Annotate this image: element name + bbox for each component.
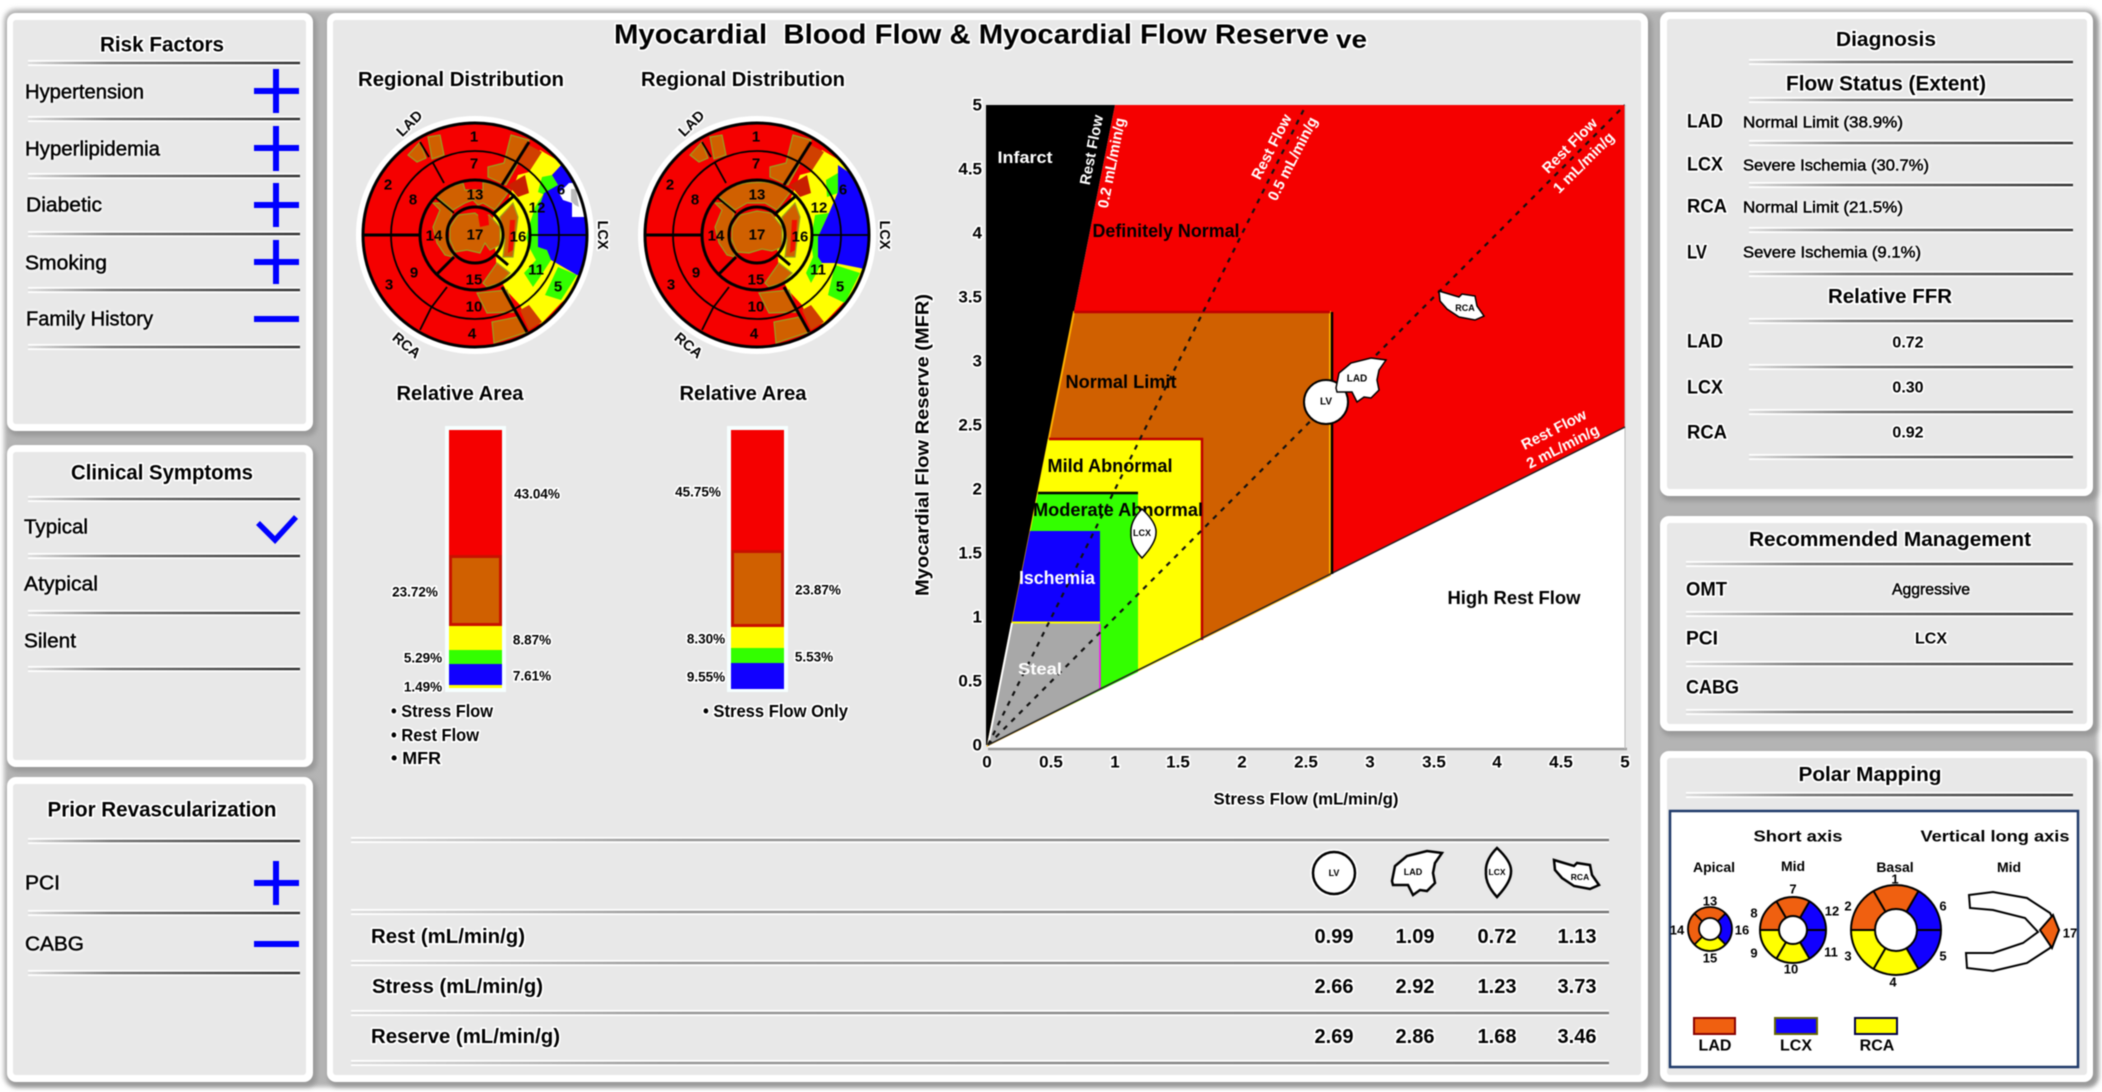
label: hyperlipidemia: Hyperlipidemia [25, 138, 161, 160]
vertical long axis shape [1966, 892, 2059, 971]
region: mild abnormal [988, 439, 1202, 745]
row: LCX status: LCX [1687, 154, 1723, 176]
marker: LV: LV [1320, 396, 1332, 408]
segment numbers: 15 [1703, 950, 1717, 966]
row: OMT: Aggressive [1892, 582, 1970, 598]
row: LCX ffr: 0.30 [1892, 380, 1924, 396]
iso-flow labels: 1 mL/min/g [1550, 129, 1618, 197]
icon: LV [1310, 849, 1358, 897]
segment numbers: 4 [1889, 974, 1897, 990]
row: rest: 1.09 [1396, 926, 1434, 948]
label: pci: PCI [25, 872, 60, 894]
segment numbers: 10 [748, 298, 764, 316]
icon: RCA: RCA [1571, 872, 1589, 882]
heading: short axis: Short axis [1754, 828, 1842, 846]
label: apical: Apical [1693, 859, 1735, 875]
region: high rest flow [988, 427, 1625, 748]
panel: prior revascularization [7, 777, 317, 1087]
iso-flow labels: Rest Flow [1539, 115, 1601, 177]
region labels: High Rest Flow [1448, 588, 1582, 608]
segment numbers: 14 [708, 228, 725, 244]
segment numbers: 16 [510, 228, 526, 246]
bar percent labels: 23.87% [795, 582, 841, 598]
region: moderate abnormal [988, 493, 1138, 745]
bar percent labels: 8.87% [513, 632, 551, 648]
segment numbers [384, 128, 565, 342]
iso-flow labels: 0.5 mL/min/g [1265, 114, 1321, 204]
row: stress: 2.66 [1315, 976, 1353, 998]
legend: right bar: • Stress Flow Only [703, 701, 848, 721]
bar percent labels: 5.29% [404, 650, 442, 666]
iso-flow labels: Rest Flow [1077, 113, 1107, 186]
x axis tick labels: 1.5 [1166, 752, 1190, 772]
row: LV status: Severe Ischemia (9.1%) [1743, 244, 1921, 262]
row: PCI: PCI [1686, 628, 1718, 650]
row: RCA ffr [1687, 422, 1924, 444]
region labels [998, 149, 1582, 678]
y axis tick labels: 3.5 [958, 288, 982, 306]
table: flow values [351, 840, 1609, 1063]
bar percent labels: 43.04% [514, 486, 560, 502]
panel: clinical symptoms [7, 445, 317, 772]
panel: polar mapping [1660, 751, 2098, 1087]
legend: LAD: LAD [1699, 1038, 1731, 1054]
icon: plus pci [254, 861, 299, 905]
heading: risk factors: Risk Factors [100, 34, 224, 56]
segment numbers: 9 [1750, 946, 1758, 960]
segment numbers: 9 [410, 264, 418, 282]
marker: RCA: RCA [1455, 303, 1475, 313]
iso-flow labels [1077, 111, 1618, 473]
x axis tick labels: 0 [982, 752, 992, 772]
legend: RCA: RCA [1860, 1038, 1895, 1054]
x axis title: Stress Flow (mL/min/g) [1214, 790, 1398, 808]
y axis title: Myocardial Flow Reserve (MFR) [912, 294, 932, 596]
label: hypertension: Hypertension [25, 80, 144, 104]
region: normal limit [988, 312, 1330, 745]
icon: plus hypertension [254, 69, 299, 113]
heading: recommended management: Recommended Management [1749, 529, 2031, 551]
region labels: Infarct [998, 149, 1053, 167]
iso-flow labels: Rest Flow [1248, 111, 1296, 182]
row: RCA status: RCA [1687, 196, 1727, 218]
label: cabg: CABG [25, 932, 84, 956]
legend: LCX: LCX [1780, 1038, 1812, 1054]
row: LAD status: Normal Limit (38.9%) [1743, 114, 1903, 132]
row: reserve: 1.68 [1478, 1026, 1516, 1048]
row: reserve: 3.46 [1558, 1026, 1596, 1048]
iso-flow labels: Rest Flow [1519, 406, 1590, 454]
segment numbers: 8 [691, 192, 699, 208]
row: rest: 0.72 [1478, 926, 1516, 948]
segment numbers: 11 [810, 262, 826, 278]
segment numbers: 10 [466, 298, 482, 316]
icon: minus cabg [254, 941, 299, 947]
legend: left bar [391, 701, 493, 768]
icon: check mark [258, 517, 296, 540]
region: steal [988, 623, 1100, 745]
donut: apical [1687, 906, 1733, 952]
heading: relative area right: Relative Area [680, 383, 807, 405]
polar map: right [638, 116, 879, 354]
segment numbers: 6 [557, 182, 565, 198]
label: RCA right: RCA [671, 330, 706, 363]
heading: diagnosis: Diagnosis [1836, 29, 1936, 51]
label: basal: Basal [1876, 859, 1914, 875]
heading: regional distribution left: Regional Distribution [358, 69, 564, 91]
label: silent: Silent [24, 630, 76, 652]
row: rest: 0.99 [1315, 926, 1353, 948]
row: stress: Stress (mL/min/g) [372, 976, 543, 998]
row: rest: 1.13 [1558, 926, 1596, 948]
row: stress [372, 976, 1596, 998]
icon: LAD: LAD [1404, 867, 1423, 877]
label: RCA left: RCA [389, 330, 424, 363]
y axis tick labels: 0.5 [958, 672, 982, 690]
legend: left bar: • MFR [391, 748, 441, 768]
x axis tick labels: 1 [1110, 752, 1120, 772]
row: OMT: OMT [1686, 580, 1727, 600]
heading: prior revascularization: Prior Revascularization [48, 798, 276, 822]
x axis tick labels: 2.5 [1294, 752, 1318, 772]
row: LAD ffr [1687, 332, 1924, 352]
label: mid long axis: Mid [1997, 859, 2021, 875]
row: PCI [1686, 628, 1947, 650]
row: stress: 3.73 [1558, 976, 1596, 998]
x axis tick labels: 4.5 [1549, 752, 1573, 772]
bar percent labels: 1.49% [404, 680, 442, 694]
label: LAD right: LAD [676, 108, 708, 140]
segment numbers: 1 [470, 128, 478, 146]
segment numbers: 7 [470, 156, 478, 172]
segment numbers: 9 [692, 264, 700, 282]
icon: LCX: LCX [1488, 867, 1506, 877]
row: rest [371, 926, 1596, 948]
icon: RCA [1554, 860, 1599, 889]
segment numbers: 2 [1844, 898, 1852, 914]
region: definitely normal [988, 105, 1625, 745]
y axis tick labels: 4 [973, 224, 983, 242]
segment numbers: 4 [750, 326, 759, 342]
segment numbers: 5 [554, 278, 562, 296]
region labels: Normal Limit [1066, 372, 1177, 392]
bar percent labels: 7.61% [513, 668, 551, 684]
icon: plus smoking [254, 240, 299, 284]
x axis tick labels: 5 [1620, 752, 1630, 772]
segment numbers: 3 [1844, 948, 1852, 964]
segment numbers: 12 [811, 200, 827, 216]
panel: center [327, 13, 1652, 1087]
segment numbers: 12 [1825, 904, 1839, 918]
region labels: Ischemia [1019, 568, 1096, 588]
segment numbers: 2 [384, 176, 392, 194]
x axis tick labels [982, 752, 1630, 772]
region labels: Moderate Abnormal [1033, 500, 1203, 520]
legend: LAD [1694, 1018, 1735, 1054]
region: ischemia [1012, 531, 1100, 622]
row: LV status [1687, 242, 1921, 264]
legend: left bar: • Stress Flow [391, 701, 493, 721]
label: CABG: CABG [1686, 678, 1739, 698]
x axis tick labels: 4 [1492, 752, 1502, 772]
y axis tick labels: 0 [973, 736, 982, 754]
legend: LCX [1775, 1018, 1817, 1054]
segment numbers: 5 [836, 278, 844, 296]
segment numbers: 17 [467, 226, 483, 244]
row: RCA ffr: 0.92 [1892, 424, 1924, 442]
region labels: Mild Abnormal [1048, 456, 1172, 476]
segment numbers: 8 [1750, 906, 1758, 920]
y axis tick labels: 4.5 [958, 160, 982, 178]
row: reserve: Reserve (mL/min/g) [371, 1026, 560, 1048]
bar percent labels: 45.75% [675, 484, 721, 500]
x axis tick labels: 3.5 [1422, 752, 1446, 772]
segment numbers: 6 [839, 182, 847, 198]
heading: relative area left: Relative Area [396, 383, 524, 405]
segment numbers: 6 [1939, 898, 1947, 914]
stacked bar: left [392, 426, 560, 694]
label: LAD left: LAD [394, 108, 426, 140]
row: reserve [371, 1026, 1596, 1048]
donut: basal [1851, 885, 1941, 975]
segment numbers: 1 [752, 128, 760, 146]
marker: LCX: LCX [1133, 528, 1151, 538]
segment numbers: 15 [466, 272, 482, 288]
row: LAD ffr: LAD [1687, 332, 1723, 352]
boundary lines [988, 748, 1627, 750]
segment numbers: 17 [749, 226, 765, 244]
icon: plus diabetic [254, 183, 299, 227]
row: RCA ffr: RCA [1687, 422, 1727, 444]
label: typical: Typical [24, 516, 88, 538]
segment numbers: 1 [1891, 872, 1899, 886]
segment numbers: 14 [426, 228, 443, 244]
y axis tick labels [958, 96, 983, 754]
segment numbers: 4 [468, 326, 477, 342]
row: rest: Rest (mL/min/g) [371, 926, 525, 948]
segment numbers: 7 [1789, 882, 1797, 896]
label: family history: Family History [26, 308, 154, 330]
label: LCX right: LCX [876, 220, 892, 250]
title: Myocardial Blood Flow & Myocardial Flow Reserve [614, 18, 1329, 50]
bar percent labels: 9.55% [687, 670, 725, 684]
iso-flow dashed lines [988, 105, 1625, 745]
marker: LCX [1131, 509, 1156, 558]
bar percent labels: 5.53% [795, 650, 833, 664]
marker: RCA [1439, 291, 1484, 320]
row: RCA status [1687, 196, 1903, 218]
row: OMT [1686, 580, 1970, 600]
iso-flow labels: 0.2 mL/min/g [1095, 116, 1129, 210]
segment numbers: 11 [1824, 944, 1838, 960]
segment numbers: 12 [529, 200, 545, 216]
y axis tick labels: 5 [973, 96, 982, 114]
title overflow fragment: ve [1336, 26, 1367, 54]
row: LCX ffr: LCX [1687, 378, 1723, 398]
segment numbers: 15 [748, 272, 764, 288]
bar percent labels [392, 486, 560, 694]
segment numbers: 10 [1784, 962, 1798, 976]
legend: RCA [1855, 1018, 1897, 1054]
segment numbers [666, 128, 847, 342]
chart: flow capacity [912, 96, 1630, 808]
label: diabetic: Diabetic [26, 194, 102, 216]
region labels: Definitely Normal [1092, 221, 1240, 241]
heading: flow status: Flow Status (Extent) [1786, 72, 1986, 96]
heading: polar mapping: Polar Mapping [1798, 764, 1942, 786]
segment numbers [1670, 872, 2077, 990]
bar percent labels: 23.72% [392, 584, 438, 600]
y axis tick labels: 1 [973, 608, 982, 626]
segment numbers: 3 [667, 276, 675, 294]
x axis tick labels: 0.5 [1039, 752, 1063, 772]
polar map: left [356, 116, 597, 354]
x axis tick labels: 3 [1365, 752, 1375, 772]
heading: vertical long axis: Vertical long axis [1920, 828, 2070, 846]
row: LCX status [1687, 154, 1929, 176]
marker: LAD [1336, 358, 1386, 402]
heading: relative ffr: Relative FFR [1828, 286, 1953, 308]
region: infarct [986, 105, 1115, 745]
icon: LAD [1392, 851, 1442, 895]
bar percent labels [675, 484, 841, 684]
iso-flow labels: 2 mL/min/g [1524, 421, 1602, 473]
segment numbers: 16 [792, 228, 808, 246]
y axis tick labels: 2 [973, 480, 982, 498]
marker: LV [1304, 380, 1348, 424]
icon: LCX [1486, 848, 1511, 897]
icon: LV: LV [1329, 868, 1339, 878]
row: LAD ffr: 0.72 [1892, 334, 1924, 352]
marker: LAD: LAD [1347, 374, 1367, 384]
label: atypical: Atypical [24, 572, 98, 596]
segment numbers: 13 [749, 186, 765, 204]
row: reserve: 2.86 [1396, 1026, 1434, 1048]
icon: plus hyperlipidemia [254, 126, 299, 171]
row: stress: 1.23 [1478, 976, 1516, 998]
row: RCA status: Normal Limit (21.5%) [1743, 200, 1903, 216]
row: LCX status: Severe Ischemia (30.7%) [1743, 158, 1929, 174]
segment numbers: 14 [1670, 922, 1685, 938]
row: LAD status [1687, 112, 1903, 132]
segment numbers: 17 [2063, 926, 2077, 940]
donut: mid [1760, 897, 1826, 963]
segment numbers: 13 [1703, 894, 1717, 908]
bar percent labels: 8.30% [687, 632, 725, 646]
legend: left bar: • Rest Flow [391, 725, 479, 745]
region labels: Steal [1018, 660, 1062, 678]
segment numbers: 7 [752, 156, 760, 172]
panel: recommended management [1660, 516, 2098, 736]
row: reserve: 2.69 [1315, 1026, 1353, 1048]
y axis tick labels: 3 [973, 352, 982, 370]
segment numbers: 8 [409, 192, 417, 208]
label: smoking: Smoking [25, 252, 107, 274]
y axis tick labels: 1.5 [958, 544, 982, 562]
y axis tick labels: 2.5 [958, 416, 982, 434]
stacked bar: right [675, 426, 841, 692]
panel: risk factors [7, 13, 317, 436]
row: LAD status: LAD [1687, 112, 1723, 132]
segment numbers: 3 [385, 276, 393, 294]
segment numbers: 16 [1735, 922, 1749, 938]
heading: clinical symptoms: Clinical Symptoms [71, 462, 253, 484]
label: LCX left: LCX [594, 220, 610, 250]
heading: regional distribution right: Regional Distribution [641, 69, 845, 91]
row: LV status: LV [1687, 242, 1707, 264]
polar mapping diagram box [1670, 811, 2078, 1067]
icon: minus family history [254, 316, 299, 322]
panel: diagnosis [1660, 12, 2098, 501]
row: PCI: LCX [1915, 630, 1947, 648]
segment numbers: 13 [467, 186, 483, 204]
segment numbers: 2 [666, 176, 674, 194]
segment numbers: 11 [528, 262, 544, 278]
label: mid: Mid [1781, 858, 1805, 874]
segment numbers: 5 [1939, 948, 1947, 964]
x axis tick labels: 2 [1237, 752, 1247, 772]
row: stress: 2.92 [1396, 976, 1434, 998]
row: LCX ffr [1687, 378, 1924, 398]
